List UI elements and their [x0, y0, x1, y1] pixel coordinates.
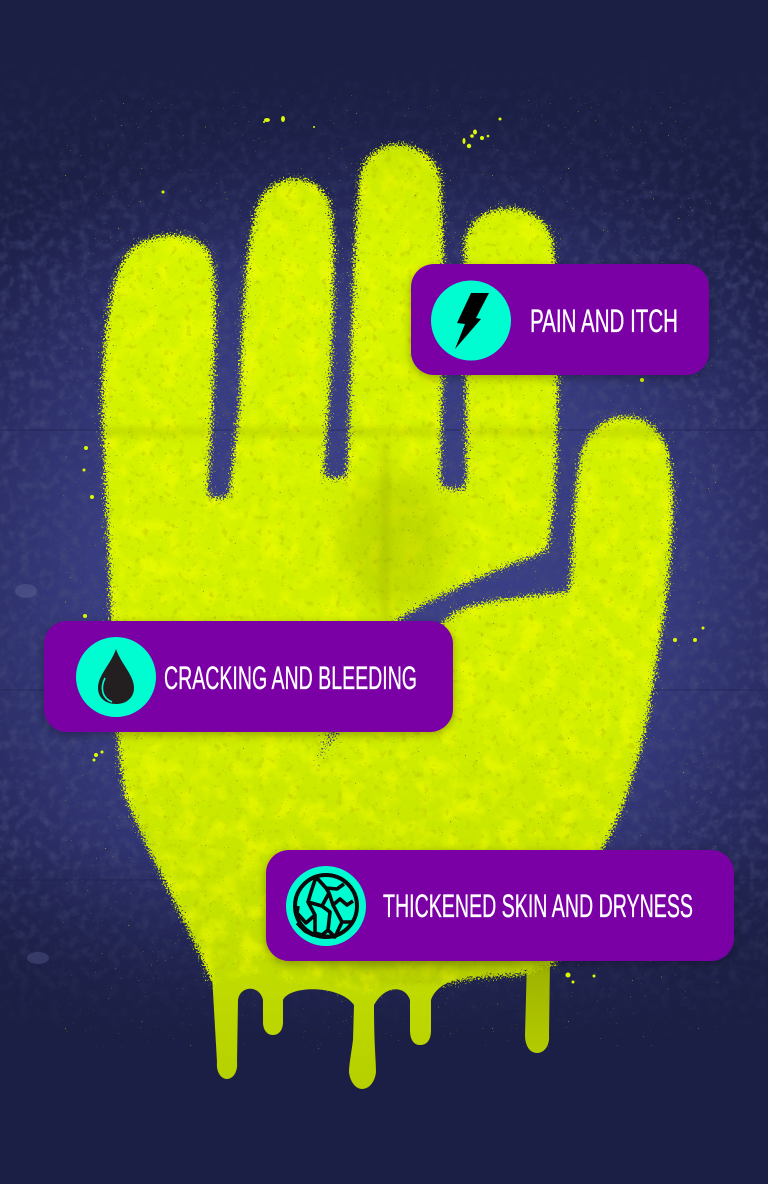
callout: thickened skin and dryness: [266, 850, 734, 961]
paint speckles: [82, 116, 704, 984]
label: cracking and bleeding: CRACKING AND BLEEDING: [164, 660, 417, 696]
icon: blood drop: [76, 637, 156, 717]
callout: cracking and bleeding: [44, 621, 453, 732]
spray-painted yellow hand: [60, 90, 720, 1089]
icon: lightning bolt: [431, 280, 511, 360]
sprayed hand body with paint texture: [60, 90, 720, 1050]
callout: pain and itch: [411, 264, 709, 375]
paint drips: [212, 960, 550, 1089]
label: pain and itch: PAIN AND ITCH: [530, 303, 678, 339]
icon: cracked skin: [286, 866, 366, 946]
